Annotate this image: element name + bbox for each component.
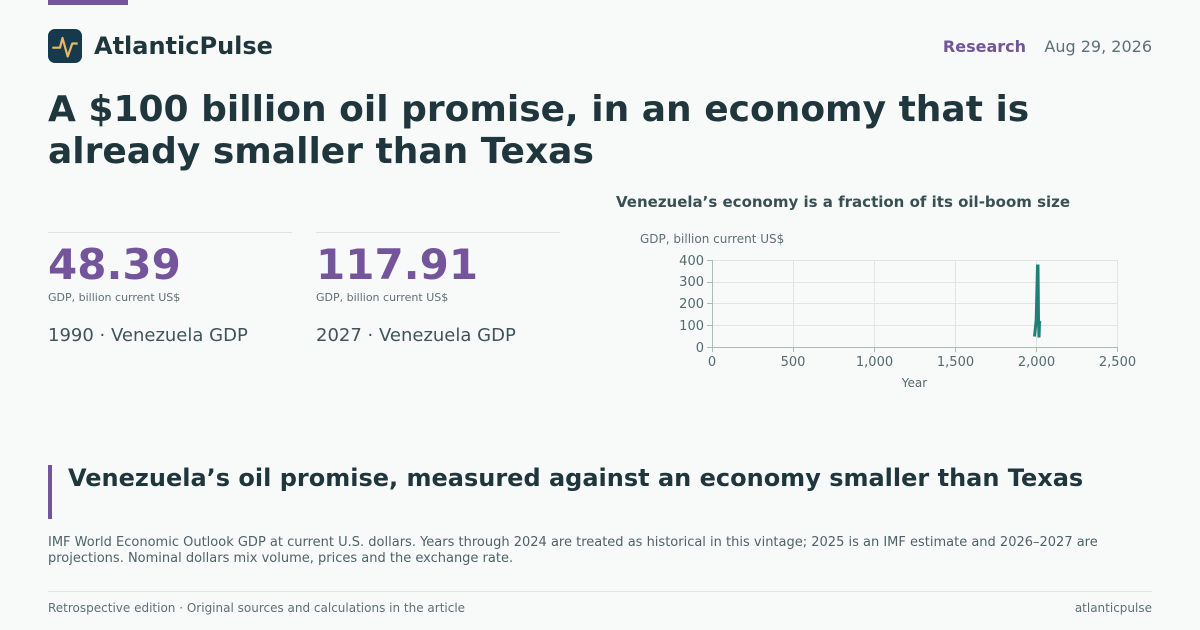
y axis title: GDP, billion current US$ — [640, 232, 784, 246]
x axis labels: 1,000 — [856, 355, 893, 370]
data line — [1034, 266, 1040, 338]
chart title: Venezuela’s economy is a fraction of its oil-boom size — [616, 192, 1070, 210]
x axis title: Year — [901, 376, 927, 390]
x axis labels — [708, 355, 1136, 370]
stat value: 117.91 — [316, 240, 478, 289]
section label: Research — [943, 37, 1026, 56]
callout heading: Venezuela’s oil promise, measured against an economy smaller than Texas — [68, 464, 1083, 492]
icon: pulse logo — [48, 29, 82, 63]
y axis labels: 300 — [679, 275, 704, 290]
callout bar — [48, 465, 52, 519]
stat: 2027 GDP — [316, 232, 560, 353]
footer rule — [48, 591, 1152, 592]
brand name: AtlanticPulse — [94, 32, 273, 60]
top accent bar — [48, 0, 128, 5]
date: Aug 29, 2026 — [1044, 37, 1152, 56]
y axis labels: 400 — [679, 254, 704, 269]
stat label: 1990 · Venezuela GDP — [48, 325, 248, 346]
title: already smaller than Texas — [48, 130, 594, 172]
title — [48, 88, 1029, 172]
stat unit: GDP, billion current US$ — [48, 291, 180, 304]
x axis labels: 500 — [781, 355, 805, 370]
methodology note: IMF World Economic Outlook GDP at current U.S. dollars. Years through 2024 are treated as historical in this vintage; 2025 is an IMF estimate and 2026–2027 are — [48, 535, 1098, 550]
x axis labels: 2,500 — [1099, 355, 1136, 370]
line chart — [640, 232, 1136, 390]
stat unit: GDP, billion current US$ — [316, 291, 448, 304]
footer right text: atlanticpulse — [1075, 601, 1152, 615]
stat value: 48.39 — [48, 240, 181, 289]
methodology note: projections. Nominal dollars mix volume, prices and the exchange rate. — [48, 551, 513, 566]
y axis labels: 100 — [679, 319, 704, 334]
y axis labels: 0 — [696, 341, 704, 356]
methodology note — [48, 535, 1098, 566]
x axis labels: 1,500 — [937, 355, 974, 370]
stat label: 2027 · Venezuela GDP — [316, 325, 516, 346]
x axis labels: 0 — [708, 355, 716, 370]
stat: 1990 GDP — [48, 232, 292, 353]
x axis labels: 2,000 — [1018, 355, 1055, 370]
title: A $100 billion oil promise, in an economy that is — [48, 88, 1029, 130]
y axis labels: 200 — [679, 297, 704, 312]
footer left text: Retrospective edition · Original sources and calculations in the article — [48, 601, 465, 615]
y axis labels — [679, 254, 704, 356]
